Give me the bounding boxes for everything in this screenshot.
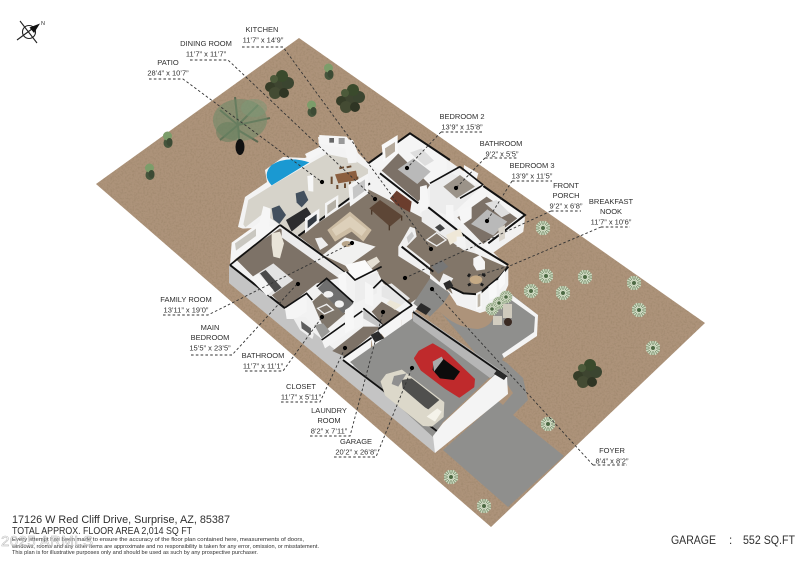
dining set (332, 166, 358, 189)
laundry room (365, 280, 412, 338)
chairs by family room (315, 237, 380, 268)
white SUV (382, 371, 443, 426)
family room wall (280, 225, 345, 283)
main bedroom (230, 263, 293, 308)
watermark: 2025 ARMLS (1, 533, 93, 550)
tree (213, 97, 270, 155)
label: family room: FAMILY ROOM (160, 295, 212, 304)
label: bathroom: BATHROOM (480, 139, 522, 148)
outdoor kitchen (305, 135, 357, 192)
kitchen counter and appliances (422, 207, 508, 271)
label: kitchen: KITCHEN (246, 25, 278, 34)
bathroom between bedrooms (420, 165, 483, 223)
garage (343, 303, 508, 453)
label: foyer: 8’4” x 8’2” (596, 456, 629, 466)
label: closet: 11’7” x 5’11” (281, 392, 322, 402)
lower rooms (230, 260, 412, 367)
back wall with windows (298, 173, 370, 236)
label: bedroom 3: 13’9” x 11’5” (512, 172, 553, 180)
disclaimer: This plan is for illustrative purposes only and should be used as such by any prospective purchaser. (12, 550, 258, 556)
house base (230, 133, 525, 360)
breakfast nook (450, 267, 508, 313)
label: patio: PATIO (157, 58, 179, 67)
label: main bedroom: MAIN (201, 323, 219, 332)
dark bushes (265, 70, 602, 388)
upper floor plan: living, kitchen, bedrooms (230, 133, 525, 317)
label: laundry room: LAUNDRY (311, 406, 347, 415)
porch plants and chairs (486, 291, 512, 326)
label: breakfast nook: BREAKFAST (589, 197, 633, 206)
tall shrubs (145, 64, 334, 180)
kitchen island cooktop (432, 260, 453, 290)
garage area: 552 SQ.FT (743, 535, 795, 547)
cars (382, 344, 474, 426)
island wall (398, 227, 433, 276)
bedroom 3 (457, 185, 525, 253)
garage area: : (729, 535, 732, 547)
label: bedroom 2: BEDROOM 2 (439, 112, 485, 121)
label: bedroom 3: BEDROOM 3 (509, 161, 555, 170)
label: closet: CLOSET (286, 382, 316, 391)
label: dining room: DINING ROOM (180, 39, 232, 48)
red car (415, 344, 474, 397)
wall below bathroom (322, 305, 363, 348)
total area: TOTAL APPROX. FLOOR AREA 2,014 SQ FT (12, 526, 192, 537)
garage area (671, 535, 795, 547)
closet (332, 308, 386, 367)
compass (17, 21, 45, 43)
label: front porch: FRONT (553, 181, 579, 190)
garage area: GARAGE (671, 535, 716, 547)
concrete driveway and walkway (430, 293, 564, 507)
patio (238, 135, 372, 238)
disclaimer: windows, rooms and any other items are approximate and no responsibility is taken for any error, omission, or misstatement. (12, 544, 319, 550)
label: main bedroom: 15’5” x 23’5” (189, 343, 231, 352)
label: dining room: 11’7” x 11’7” (186, 50, 227, 58)
label: breakfast nook: 11’7” x 10’6” (591, 217, 632, 226)
label: main bedroom: BEDROOM (191, 333, 229, 342)
bathroom (285, 278, 353, 339)
label: breakfast nook: NOOK (600, 207, 622, 216)
label: bathroom lower: BATHROOM (242, 351, 284, 360)
label: laundry room: 8’2” x 7’11” (311, 426, 348, 435)
dining table (369, 191, 412, 230)
label: front porch: PORCH (552, 191, 580, 200)
room labels (147, 25, 634, 466)
label: bedroom 2: 13’9” x 15’8” (441, 122, 483, 132)
label: laundry room: ROOM (317, 416, 341, 425)
trees and shrubs (145, 64, 660, 513)
label: family room: 13’11” x 19’0” (164, 306, 209, 314)
label: garage: 20’2” x 26’8” (335, 448, 377, 456)
label: bathroom: 9’2” x 5’5” (486, 150, 519, 158)
address: 17126 W Red Cliff Drive, Surprise, AZ, 85387 (12, 514, 230, 526)
label: bathroom lower: 11’7” x 11’1” (243, 362, 284, 370)
label: garage: GARAGE (340, 437, 372, 446)
living and hall floor (298, 189, 507, 303)
compass: N (41, 21, 45, 27)
porch low wall (502, 292, 538, 358)
outer wall strip (229, 265, 442, 453)
closet cube and columns (338, 260, 382, 303)
rug (323, 237, 376, 267)
leader lines and room dots (149, 47, 630, 465)
label: kitchen: 11’7” x 14’9” (243, 36, 284, 44)
label: patio: 28’4” x 10’7” (147, 68, 189, 78)
patio seating (272, 191, 312, 232)
main bedroom floor and back wall (230, 206, 345, 308)
foyer (413, 278, 450, 317)
coffee table (342, 241, 352, 247)
label: front porch: 9’2” x 6’8” (550, 201, 583, 210)
agaves (444, 221, 660, 513)
land plot (96, 38, 705, 527)
sofa (327, 212, 372, 242)
pool (267, 159, 309, 185)
disclaimer: Every attempt has been made to ensure the accuracy of the floor plan contained here, measurements of doors, (12, 537, 304, 543)
bedroom 2 (368, 133, 450, 203)
label: foyer: FOYER (599, 446, 625, 455)
